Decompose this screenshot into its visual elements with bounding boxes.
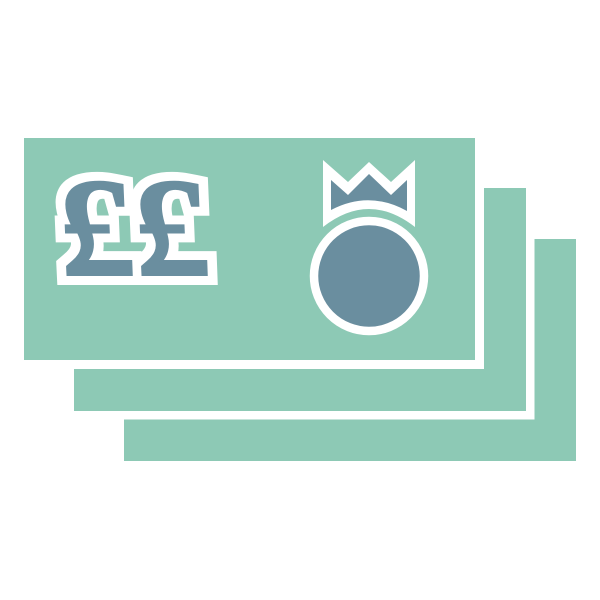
second pound sign outline: £ <box>113 150 225 306</box>
icon: crown with coin <box>314 160 424 331</box>
white gap around middle banknote <box>124 239 534 420</box>
white gap around front banknote <box>74 188 484 369</box>
middle banknote <box>74 188 526 411</box>
back banknote <box>124 239 576 461</box>
second pound sign: £ <box>113 150 225 306</box>
crown fill <box>331 174 407 211</box>
pound symbols <box>38 150 225 306</box>
crown outline <box>323 160 415 227</box>
first pound sign: £ <box>38 150 150 306</box>
front banknote <box>24 138 475 360</box>
coin <box>314 221 424 331</box>
first pound sign outline: £ <box>38 150 150 306</box>
